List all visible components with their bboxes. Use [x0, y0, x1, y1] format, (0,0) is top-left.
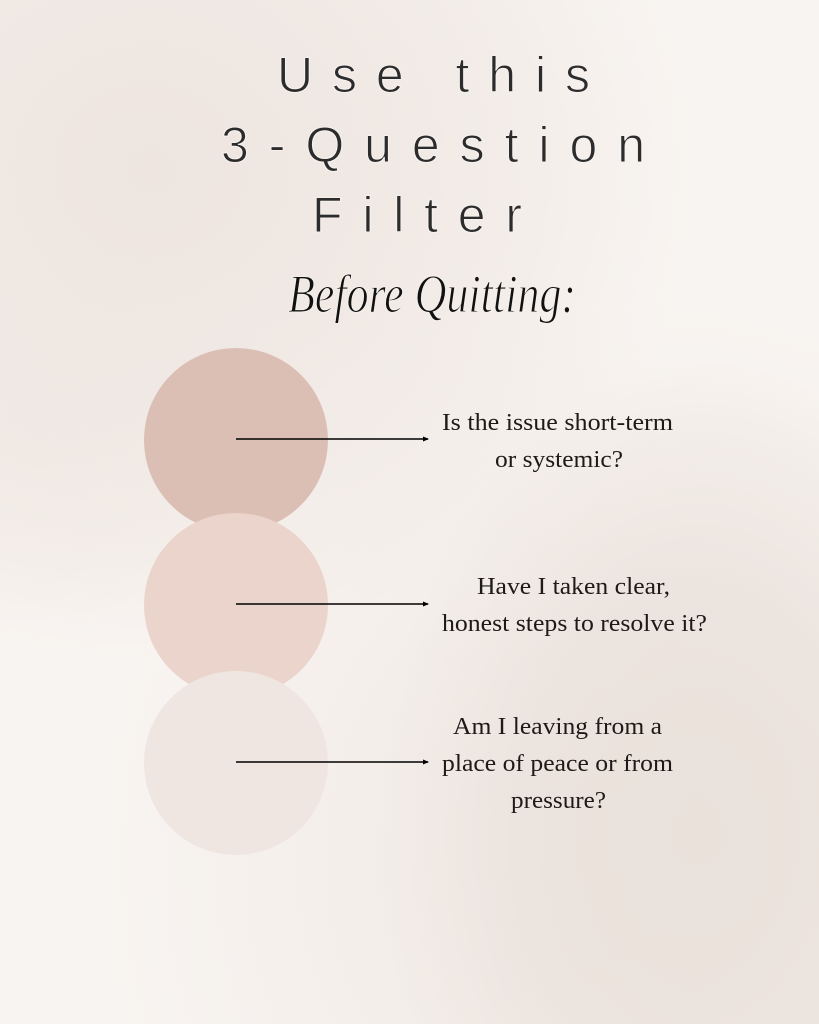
text: question 3: place of peace or from — [442, 751, 673, 777]
text: question 3: pressure? — [511, 788, 606, 814]
title: Use this — [277, 47, 590, 103]
text: question 1: Is the issue short-term — [442, 410, 673, 436]
text: question 3: Am I leaving from a — [453, 714, 662, 740]
text: question 1: or systemic? — [495, 447, 623, 473]
title: 3-Question — [221, 117, 645, 173]
arrow: question 1 — [236, 438, 428, 440]
arrow: question 2 — [236, 603, 428, 605]
text: question 2 — [442, 574, 707, 637]
title: Filter — [312, 187, 522, 243]
text: question 1 — [442, 410, 673, 473]
script subtitle: Before Quitting: — [288, 264, 576, 324]
text: question 3 — [442, 714, 673, 814]
arrow: question 3 — [236, 761, 428, 763]
circle: question 3 — [144, 671, 328, 855]
title — [221, 47, 645, 243]
text: question 2: Have I taken clear, — [477, 574, 670, 600]
circle: question 2 — [144, 513, 328, 697]
text: question 2: honest steps to resolve it? — [442, 611, 707, 637]
circle: question 1 — [144, 348, 328, 532]
